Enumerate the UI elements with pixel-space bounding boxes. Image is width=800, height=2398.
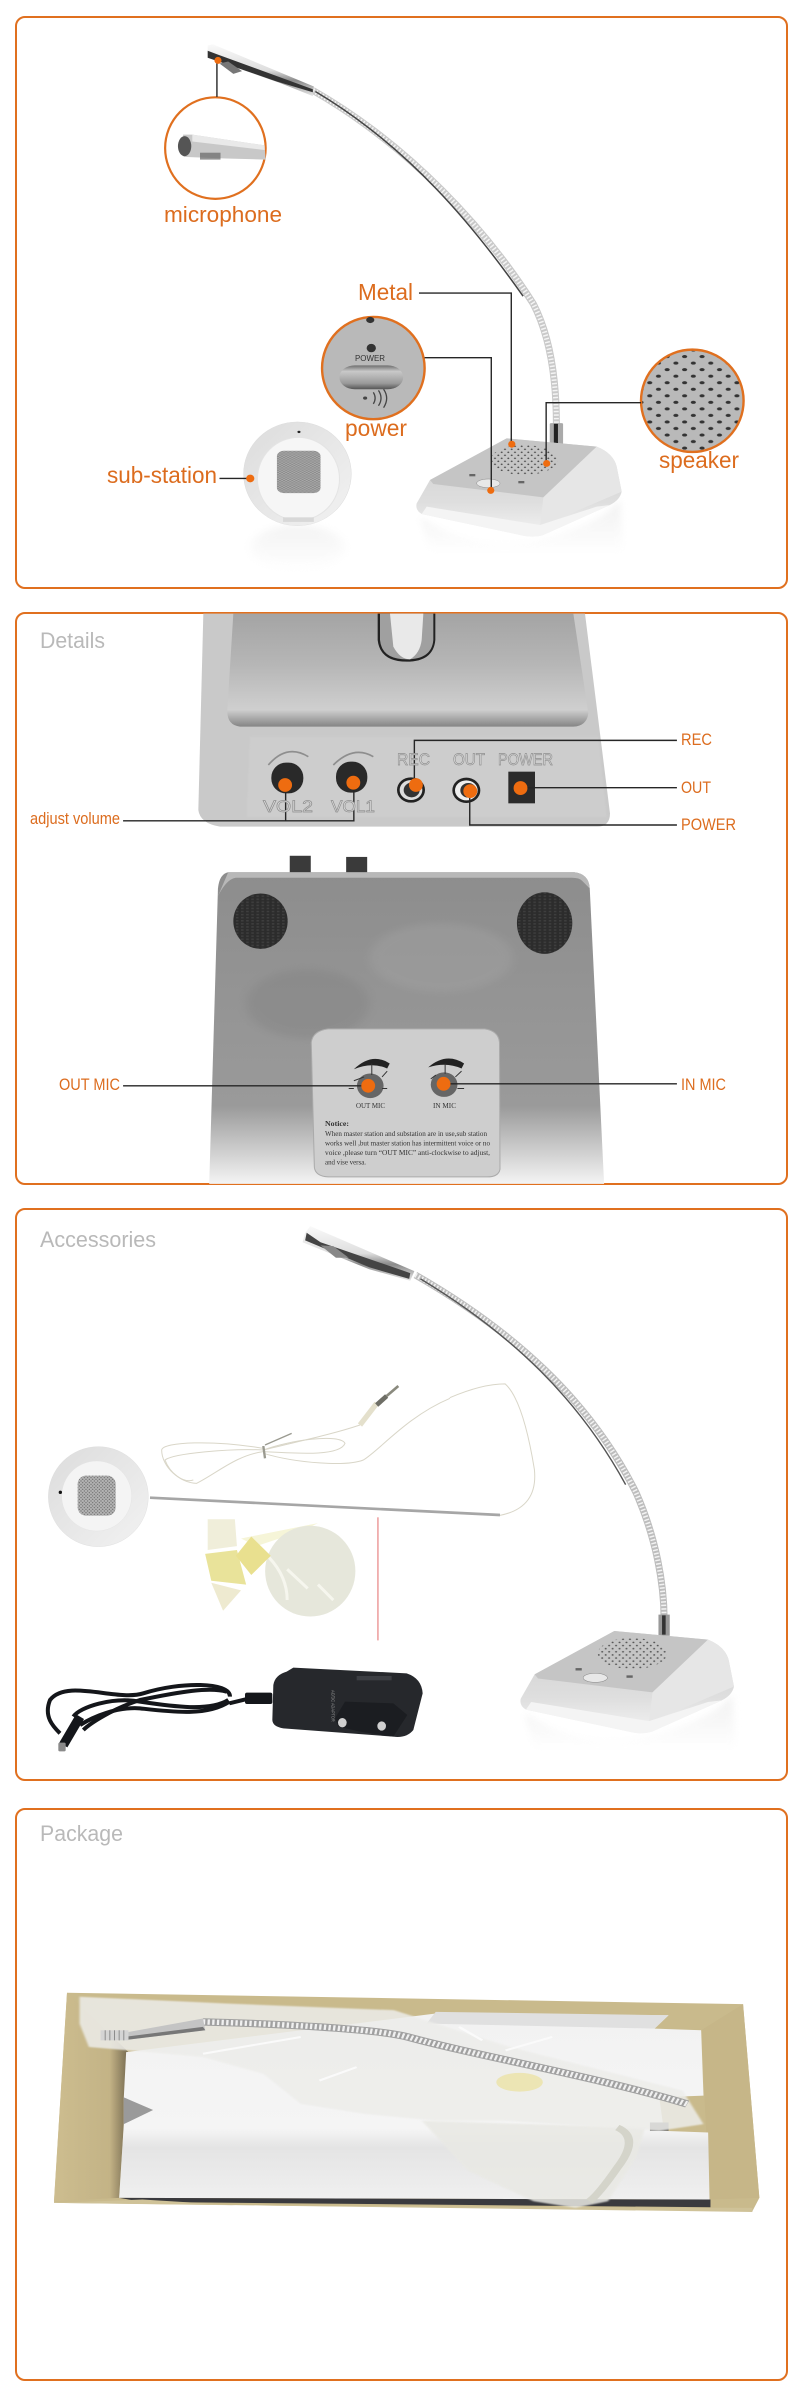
heading: Package: Package xyxy=(40,1821,123,1846)
heading: Details: Details xyxy=(40,628,105,653)
photo: underside of base xyxy=(209,856,604,1184)
callout line: OUT MIC xyxy=(123,1085,368,1087)
panel markings: VOL1 xyxy=(331,797,375,816)
callout line: POWER xyxy=(470,791,677,825)
callouts xyxy=(123,740,677,1093)
photo: open package box xyxy=(54,1993,759,2212)
gooseneck and adhesive items xyxy=(205,1226,670,1640)
callout line: IN MIC xyxy=(444,1083,677,1085)
callout line: microphone xyxy=(216,58,218,97)
sticker text: Notice: xyxy=(325,1119,349,1128)
callout line: metal xyxy=(419,293,511,444)
label: REC: REC xyxy=(681,730,712,749)
label: power: power xyxy=(345,415,407,441)
panel markings: POWER xyxy=(498,750,553,769)
sticker text: voice ,please turn “OUT MIC” anti-clockwise to adjust, xyxy=(325,1148,490,1157)
circle: microphone close-up xyxy=(165,97,266,199)
sticker text: IN MIC xyxy=(433,1101,456,1110)
sticker text: When master station and substation are in use,sub station xyxy=(325,1129,487,1138)
icon: gooseneck microphone xyxy=(303,1226,670,1636)
label: POWER: POWER xyxy=(681,815,736,834)
panel: product overview xyxy=(16,17,787,588)
sticker text: works well ,but master station has intermittent voice or no xyxy=(325,1138,490,1148)
label: adjust volume: adjust volume xyxy=(30,809,120,828)
icon: rod xyxy=(150,1498,500,1515)
panel: package xyxy=(16,1809,787,2380)
label: sub-station: sub-station xyxy=(107,462,217,488)
gooseneck in bag xyxy=(101,2019,687,2104)
panel markings: REC xyxy=(397,750,430,769)
adapter rating label: AC/DC ADAPTOR xyxy=(331,1690,336,1722)
callout line: speaker xyxy=(546,403,641,463)
heading: Accessories: Accessories xyxy=(40,1227,156,1252)
icon: sub-station xyxy=(244,422,351,571)
panel markings xyxy=(263,750,553,816)
product illustration and callouts xyxy=(165,44,744,571)
icon: long wire run xyxy=(450,1384,535,1515)
panel: details xyxy=(16,613,787,1184)
icon: adhesive pads xyxy=(205,1519,355,1617)
plate: notice sticker xyxy=(311,1029,500,1177)
callout line: adjust volume xyxy=(123,783,354,821)
icon: power adapter xyxy=(48,1668,423,1751)
volume knobs and sockets xyxy=(268,752,535,803)
photo: back of base xyxy=(198,614,610,827)
label: IN MIC: IN MIC xyxy=(681,1075,726,1094)
panel markings: VOL2 xyxy=(263,797,313,816)
label: OUT: OUT xyxy=(681,778,711,797)
marker dots xyxy=(278,776,527,1093)
power close-up label: POWER xyxy=(355,353,385,363)
sub-station and audio cable xyxy=(48,1386,500,1547)
icon: speaker base xyxy=(416,438,623,553)
callout line: power xyxy=(425,358,491,490)
inner tray xyxy=(54,2012,752,2212)
marker dots xyxy=(214,57,550,494)
sticker text: OUT MIC xyxy=(356,1101,385,1110)
callouts over base xyxy=(214,57,641,494)
icon: red line xyxy=(377,1517,379,1640)
sticker text: and vise versa. xyxy=(325,1158,366,1166)
icon: audio cable xyxy=(162,1386,450,1483)
sticker text xyxy=(325,1101,490,1166)
label: OUT MIC: OUT MIC xyxy=(59,1075,120,1094)
circle: speaker close-up xyxy=(641,350,744,452)
label: microphone: microphone xyxy=(164,202,282,227)
plastic wrap xyxy=(80,1997,703,2208)
label: speaker: speaker xyxy=(659,447,739,473)
icon: sub-station xyxy=(48,1447,148,1547)
panel markings: OUT xyxy=(453,750,485,769)
base station body xyxy=(520,1631,736,1751)
icon: jacks xyxy=(397,772,535,803)
cardboard box xyxy=(54,1993,759,2211)
circle: power button close-up xyxy=(322,317,425,419)
icon: volume knobs xyxy=(268,752,373,793)
callout line: sub-station xyxy=(219,477,250,479)
callout line: OUT xyxy=(521,787,677,789)
callout line: REC xyxy=(414,740,677,785)
label: Metal: Metal xyxy=(358,279,413,305)
icon: gooseneck microphone arm xyxy=(208,44,563,446)
panel: accessories xyxy=(16,1209,787,1780)
